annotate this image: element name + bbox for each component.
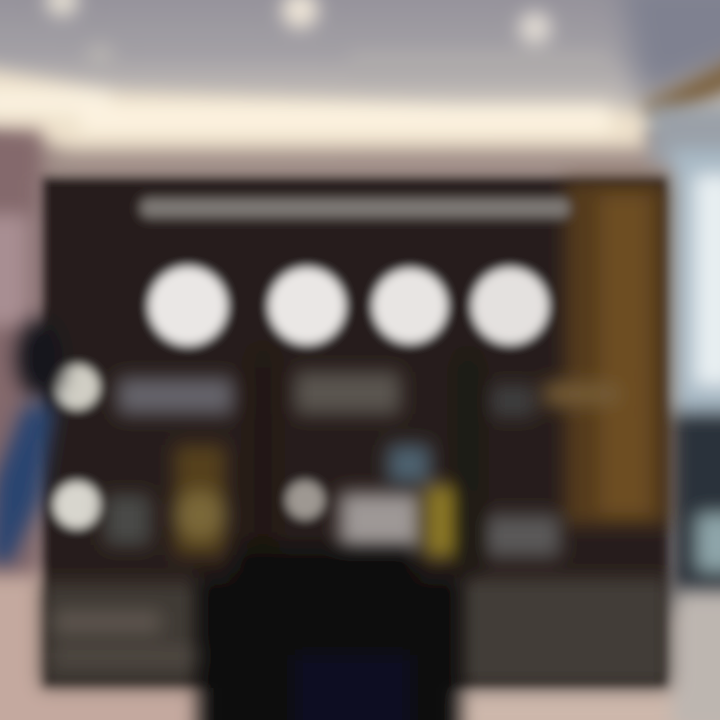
text block cluster upper [118, 372, 620, 417]
wood beam upper right [640, 45, 720, 122]
wood panel right [565, 180, 668, 525]
circles row [149, 267, 548, 345]
ceiling lights [46, 0, 610, 74]
circle 2 [269, 268, 345, 344]
lower wall panel [42, 578, 668, 686]
small icons [54, 365, 324, 528]
icon lower left [54, 482, 100, 528]
icon upper left [55, 365, 99, 409]
mid wall above display [0, 130, 720, 180]
circle 4 [472, 268, 548, 344]
text block cluster lower [105, 493, 560, 557]
circle 3 [373, 269, 447, 343]
person left [0, 318, 64, 565]
right wall and window [650, 105, 720, 610]
bright light band [0, 68, 650, 150]
left wall [0, 130, 42, 590]
gold accents [174, 445, 463, 557]
title [140, 198, 570, 218]
icon centre [286, 481, 324, 519]
floor [0, 575, 720, 720]
ceiling [0, 0, 720, 130]
dark display wall [42, 176, 668, 688]
person centre foreground [198, 548, 460, 720]
central vertical shadows [252, 350, 478, 570]
circle 1 [149, 267, 227, 345]
